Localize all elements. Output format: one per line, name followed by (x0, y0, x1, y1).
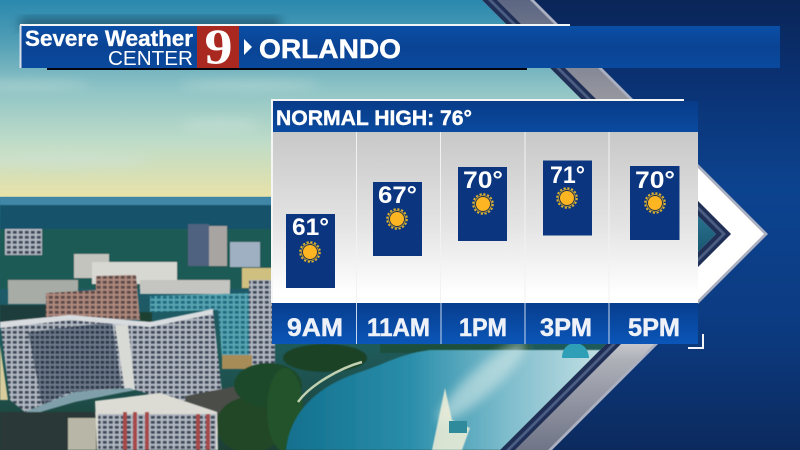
sky (0, 0, 581, 197)
fountain (432, 388, 470, 450)
arrow (244, 39, 252, 55)
header shadow (47, 66, 527, 70)
bar: 11AM 67 (373, 182, 422, 256)
bar: 9AM 61 (286, 214, 335, 288)
bar: 3PM 71 (543, 160, 592, 236)
red-brown building (46, 275, 140, 320)
panel white frame (271, 99, 684, 102)
right tower (249, 280, 275, 372)
trees (216, 398, 274, 450)
hotel (0, 309, 222, 412)
bar: 11AM 67: 67° (378, 182, 417, 209)
panel heading: NORMAL HIGH: 76° (276, 107, 472, 130)
bar: 9AM 61: 61° (292, 214, 329, 241)
brand text line 2: CENTER (108, 47, 193, 70)
low white buildings (74, 254, 109, 278)
header blue bar (20, 26, 780, 68)
dome (562, 343, 589, 358)
header white rule (20, 24, 570, 26)
time labels: 1PM (459, 314, 507, 342)
chart body (273, 132, 698, 303)
footer bar (272, 303, 698, 344)
shoreline path (298, 362, 362, 402)
time labels: 3PM (540, 314, 592, 342)
panel heading bar (273, 101, 698, 132)
time labels: 5PM (628, 314, 680, 342)
front building (95, 393, 218, 450)
time labels (287, 314, 680, 342)
fountain mist (433, 344, 532, 424)
time labels: 9AM (287, 314, 343, 342)
dark trees between buildings (0, 305, 46, 323)
tower left (5, 229, 42, 255)
bar: 1PM 70: 70° (463, 167, 503, 194)
logo nine: 9 (204, 18, 232, 74)
header dark halo (20, 18, 280, 30)
time labels: 11AM (367, 314, 430, 342)
distant haze (0, 197, 272, 205)
corner bracket (688, 334, 703, 348)
clouds (0, 80, 320, 169)
chevron frame band (480, 0, 768, 450)
bar: 5PM 70 (630, 166, 680, 240)
brand text line 1: Severe Weather (25, 26, 193, 51)
column dividers (356, 132, 610, 303)
forecast panel (271, 99, 698, 344)
land (0, 197, 730, 450)
location name: ORLANDO (259, 34, 401, 64)
bar: 1PM 70 (458, 167, 507, 241)
bar: 3PM 71: 71° (550, 162, 585, 189)
logo red box (197, 26, 239, 68)
header bar (20, 18, 780, 74)
teal building (150, 293, 252, 358)
low roofs (0, 412, 97, 450)
bar: 5PM 70: 70° (635, 167, 675, 194)
tower centre (188, 224, 209, 266)
lake (286, 349, 600, 450)
